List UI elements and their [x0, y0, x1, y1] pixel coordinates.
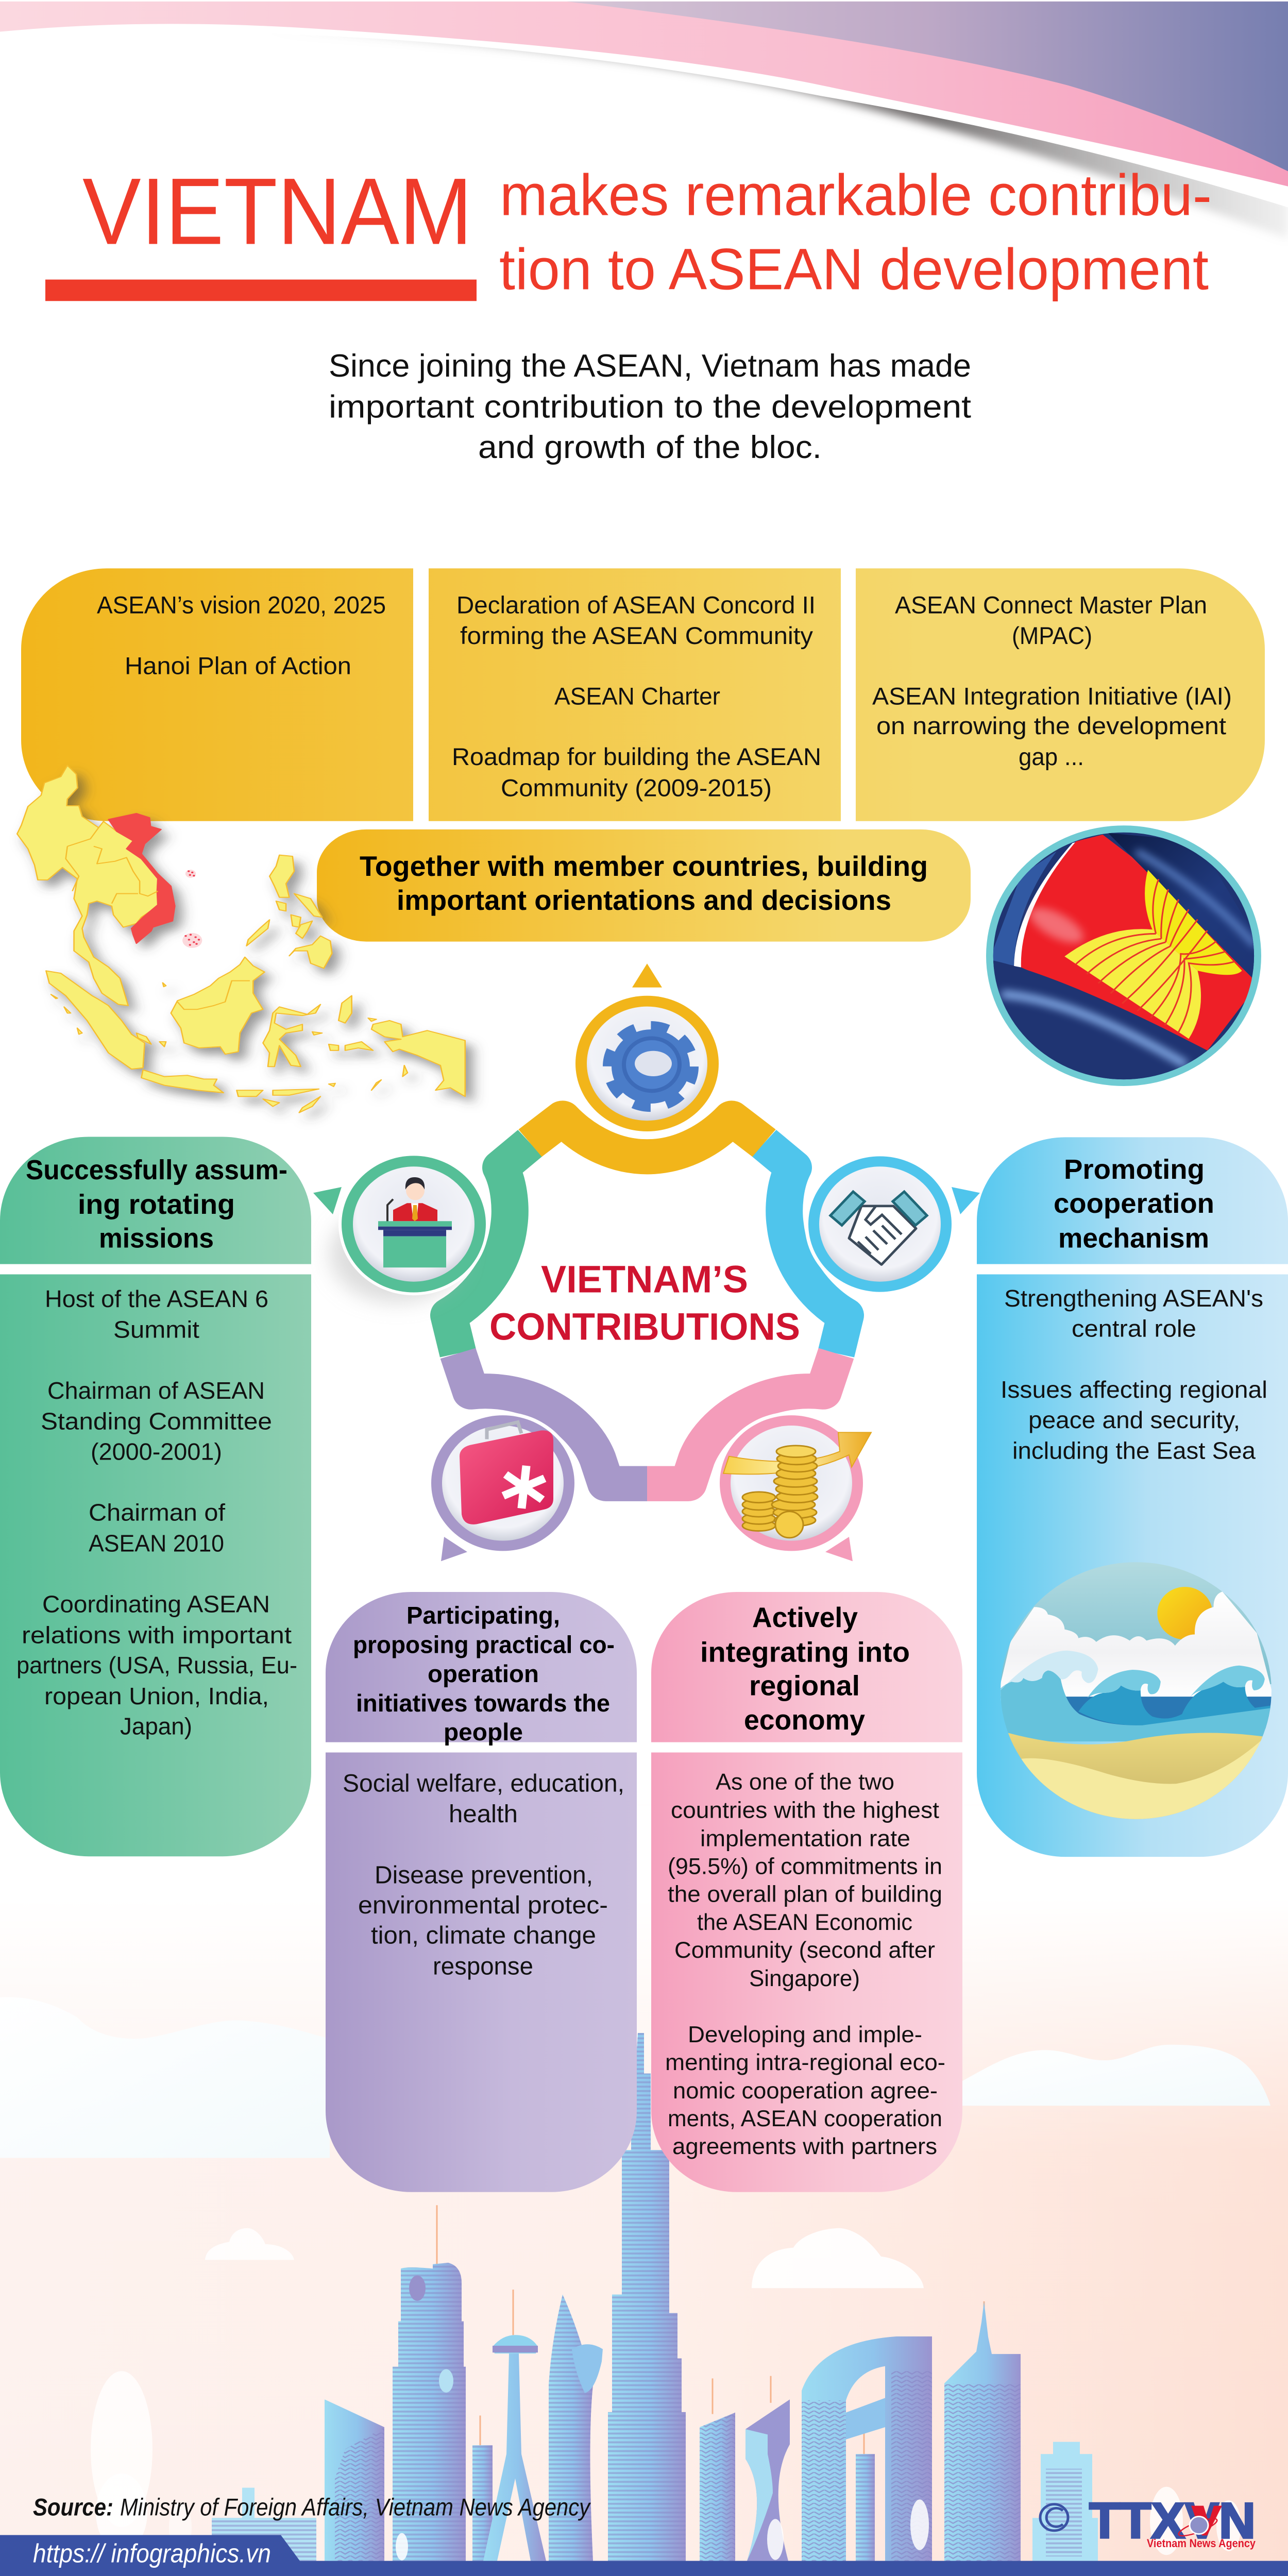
panel: Master Plan: ASEAN Connect Master Plan	[895, 592, 1207, 619]
text: practical cooperation	[343, 1769, 624, 1980]
background clouds	[0, 1997, 1270, 2288]
text: regional economy: (95.5%) of commitments in	[668, 1853, 942, 1879]
intro text: Since joining the ASEAN, Vietnam has made	[329, 348, 971, 384]
heading: practical cooperation: proposing practical co-	[353, 1632, 615, 1658]
text: cooperation mechanism: Issues affecting regional	[1001, 1377, 1267, 1403]
logo: TTXVN: TTXVN	[1089, 2493, 1256, 2549]
background: peach sky	[0, 1805, 1288, 2576]
text: rotating missions: Standing Committee	[41, 1409, 272, 1435]
panel: ASEAN Concord: Community (2009-2015)	[501, 775, 772, 802]
text: regional economy: menting intra-regional eco-	[665, 2049, 945, 2075]
title: tion to ASEAN development	[499, 236, 1209, 302]
text: rotating missions: relations with important	[22, 1622, 292, 1649]
ring: amber segment	[530, 1118, 764, 1157]
panel: ASEAN vision	[21, 568, 413, 821]
map of Southeast Asia	[17, 766, 465, 1113]
ring: blue segment	[764, 1143, 845, 1353]
intro text: and growth of the bloc.	[478, 429, 822, 465]
panel: ASEAN Concord: forming the ASEAN Community	[460, 622, 814, 650]
text: regional economy: implementation rate	[700, 1825, 910, 1851]
heading: practical cooperation	[353, 1602, 615, 1746]
text: regional economy: the overall plan of building	[668, 1881, 942, 1907]
orientation pill: Together with member countries, building	[360, 850, 928, 882]
text: cooperation mechanism: including the East Sea	[1012, 1438, 1256, 1464]
ring: pink segment	[647, 1353, 836, 1484]
intro text: important contribution to the development	[329, 388, 971, 425]
panel: ASEAN Concord	[429, 568, 841, 821]
panel: Master Plan: on narrowing the development	[876, 713, 1226, 740]
text: rotating missions: partners (USA, Russia, Eu-	[16, 1652, 297, 1679]
text: rotating missions: Chairman of ASEAN	[47, 1378, 265, 1404]
text: practical cooperation: Disease prevention,	[375, 1861, 593, 1889]
title: makes remarkable contribu-	[500, 162, 1212, 228]
contributions ring	[449, 1118, 845, 1484]
panel: Master Plan: (MPAC)	[1012, 622, 1092, 650]
panel: Master Plan: ASEAN Integration Initiative (IAI)	[872, 683, 1232, 710]
text: rotating missions	[16, 1286, 297, 1740]
text: regional economy: Community (second after	[674, 1937, 935, 1963]
skyline illustration	[91, 2033, 1241, 2561]
text: practical cooperation: Social welfare, education,	[343, 1769, 624, 1797]
heading: practical cooperation: Participating,	[406, 1602, 560, 1629]
central heading	[489, 1258, 800, 1348]
heading: practical cooperation: operation	[428, 1660, 539, 1688]
text: regional economy: nomic cooperation agree-	[673, 2078, 938, 2104]
text: rotating missions: (2000-2001)	[91, 1438, 222, 1465]
text: practical cooperation: environmental protec-	[358, 1891, 608, 1919]
panel: ASEAN Concord: Roadmap for building the ASEAN	[452, 743, 821, 771]
title: VIETNAM	[82, 159, 472, 264]
pointer arrows	[313, 963, 980, 1561]
text: cooperation mechanism	[1001, 1285, 1267, 1464]
text: regional economy: the ASEAN Economic	[697, 1909, 912, 1935]
heading: regional economy: regional	[749, 1670, 860, 1701]
icon: handshake	[805, 1153, 955, 1295]
icon: gear	[567, 988, 727, 1139]
text: cooperation mechanism: peace and security,	[1028, 1407, 1240, 1433]
header swoosh	[0, 0, 1288, 239]
ring: green segment	[449, 1143, 530, 1353]
heading: regional economy	[700, 1602, 910, 1736]
icon: speaker at podium	[330, 1153, 489, 1302]
source line: Ministry of Foreign Affairs, Vietnam News Agency	[120, 2494, 591, 2521]
text: practical cooperation: health	[449, 1800, 518, 1828]
footer band	[0, 2535, 1288, 2576]
illustration: sea and beach	[998, 1560, 1275, 1821]
text: rotating missions: Coordinating ASEAN	[42, 1591, 270, 1618]
text: regional economy: ments, ASEAN cooperation	[668, 2106, 942, 2131]
text: rotating missions: ropean Union, India,	[44, 1683, 269, 1709]
orientation pill	[317, 829, 971, 942]
text: regional economy	[665, 1769, 945, 2159]
panel: Master Plan	[856, 568, 1265, 821]
text: rotating missions: Summit	[113, 1317, 199, 1343]
heading: rotating missions: Successfully assum-	[26, 1154, 287, 1185]
heading: rotating missions: missions	[99, 1223, 214, 1253]
heading: rotating missions	[26, 1154, 287, 1253]
text: rotating missions: Chairman of	[89, 1500, 226, 1526]
heading: practical cooperation: people	[444, 1719, 523, 1746]
text: regional economy: As one of the two	[716, 1769, 894, 1794]
icon: gold coins and arrow	[716, 1412, 871, 1554]
panel: Master Plan: gap ...	[1019, 743, 1084, 771]
heading: cooperation mechanism: cooperation	[1054, 1188, 1214, 1219]
text: cooperation mechanism: central role	[1072, 1316, 1196, 1342]
icon: medical kit	[428, 1412, 578, 1554]
panel: rotating missions	[0, 1137, 311, 1856]
source line: Source:	[33, 2494, 113, 2521]
panel: ASEAN vision: Hanoi Plan of Action	[125, 653, 351, 680]
heading: regional economy: economy	[744, 1704, 866, 1736]
text: rotating missions: Japan)	[120, 1714, 192, 1740]
panel: practical cooperation	[326, 1592, 637, 2192]
panel: cooperation mechanism	[977, 1137, 1288, 1857]
panel: ASEAN vision: ASEAN’s vision 2020, 2025	[97, 592, 386, 619]
text: regional economy: Singapore)	[749, 1965, 860, 1991]
heading: cooperation mechanism: mechanism	[1058, 1223, 1209, 1253]
logo: TTXVN: Vietnam News Agency	[1147, 2537, 1256, 2550]
central heading: CONTRIBUTIONS	[489, 1306, 800, 1348]
panel: ASEAN Concord: ASEAN Charter	[554, 683, 720, 710]
heading: regional economy: integrating into	[700, 1636, 910, 1668]
panel: regional economy	[651, 1592, 962, 2192]
heading: cooperation mechanism	[1054, 1154, 1214, 1253]
title	[45, 159, 1212, 302]
ring: purple segment	[458, 1353, 647, 1484]
heading: regional economy: Actively	[752, 1602, 858, 1633]
text: regional economy: countries with the highest	[671, 1798, 939, 1823]
intro text	[329, 348, 971, 465]
text: practical cooperation: response	[433, 1952, 533, 1980]
heading: cooperation mechanism: Promoting	[1064, 1154, 1205, 1185]
text: rotating missions: ASEAN 2010	[89, 1531, 224, 1557]
icon: ASEAN flag	[986, 824, 1262, 1087]
central heading: VIETNAM’S	[541, 1258, 748, 1301]
text: rotating missions: Host of the ASEAN 6	[45, 1286, 268, 1313]
heading: practical cooperation: initiatives towards the	[356, 1690, 610, 1717]
text: regional economy: agreements with partners	[672, 2133, 937, 2159]
orientation pill: important orientations and decisions	[397, 885, 891, 916]
footer band: https:// infographics.vn	[33, 2539, 271, 2568]
text: cooperation mechanism: Strengthening ASEAN's	[1004, 1285, 1263, 1312]
heading: rotating missions: ing rotating	[78, 1189, 235, 1220]
panel: ASEAN Concord: Declaration of ASEAN Concord II	[456, 592, 816, 619]
text: practical cooperation: tion, climate change	[371, 1921, 596, 1949]
text: regional economy: Developing and imple-	[688, 2022, 922, 2047]
